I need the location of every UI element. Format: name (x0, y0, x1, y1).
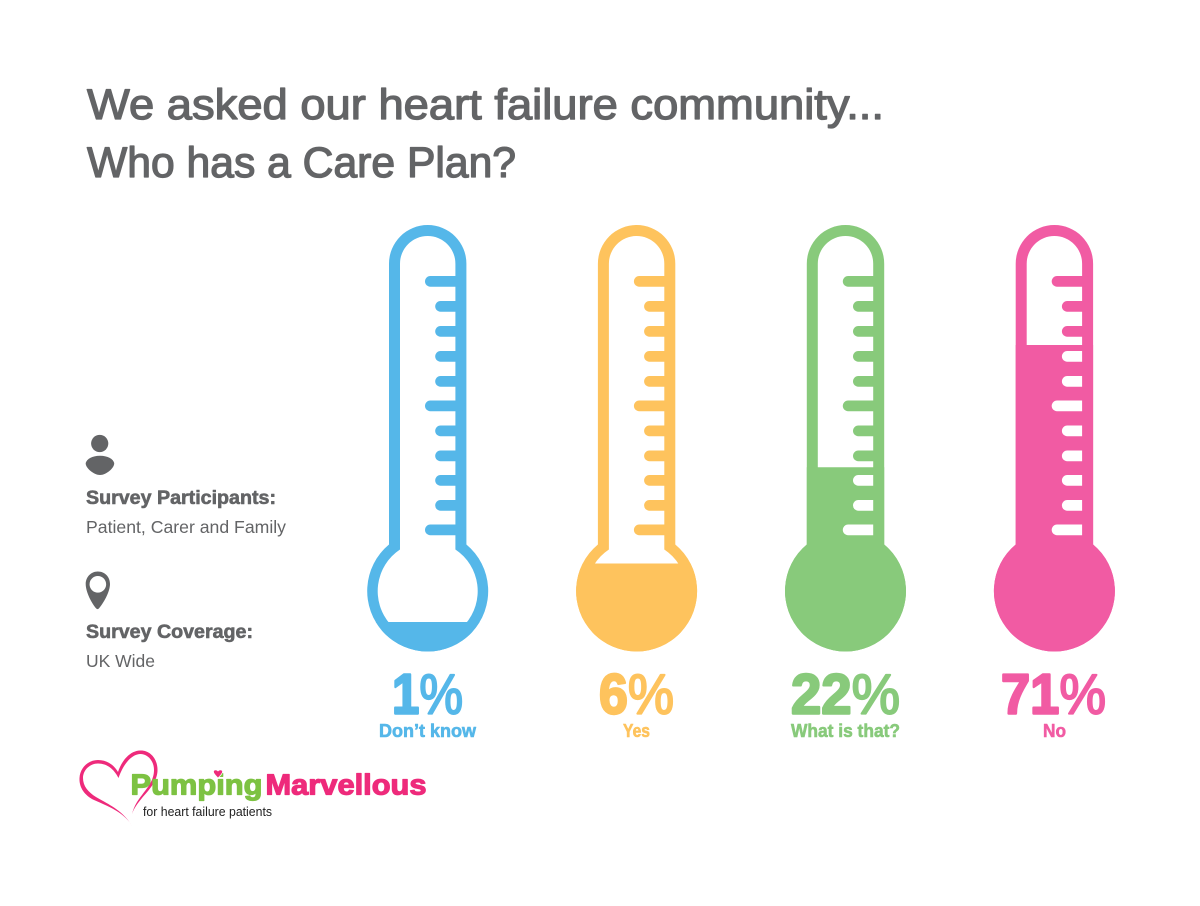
logo wordmark (130, 770, 426, 802)
result: 1% Don't know: 1% (392, 662, 463, 726)
icon: person (86, 435, 114, 475)
result: 22% What is that?: What is that? (791, 721, 900, 741)
title: Who has a Care Plan? (87, 139, 516, 187)
survey participants text: Patient, Carer and Family (86, 517, 286, 537)
icon: location pin (86, 572, 110, 609)
title (87, 81, 884, 187)
thermometer: No 71% (994, 225, 1115, 652)
infographic (79, 87, 1115, 824)
logo tagline: for heart failure patients (143, 805, 272, 819)
result: 1% Don't know: Don’t know (379, 721, 477, 741)
logo wordmark: Marvellous (266, 770, 426, 802)
logo i-dot heart (214, 770, 222, 778)
thermometer: Don't know 1% (367, 225, 488, 652)
panel: survey details (86, 435, 286, 671)
survey participants text: Survey Participants: (86, 488, 276, 509)
logo: Pumping Marvellous (79, 750, 426, 827)
result: 71% No: No (1043, 721, 1066, 741)
result: 71% No: 71% (1001, 662, 1106, 726)
result: 1% Don't know (379, 662, 477, 741)
thermometer: What is that? 22% (785, 225, 906, 652)
survey coverage text: Survey Coverage: (86, 622, 253, 643)
thermometer: Yes 6% (576, 225, 697, 652)
result: 22% What is that?: 22% (791, 662, 900, 726)
result: 6% Yes: 6% (599, 662, 674, 726)
survey coverage text: UK Wide (86, 651, 155, 671)
survey participants text (86, 488, 286, 537)
logo heart outline (79, 750, 158, 827)
title: We asked our heart failure community... (87, 81, 884, 129)
result: 6% Yes: Yes (623, 721, 650, 741)
logo wordmark: Pumping (130, 770, 262, 802)
survey coverage text (86, 622, 253, 671)
